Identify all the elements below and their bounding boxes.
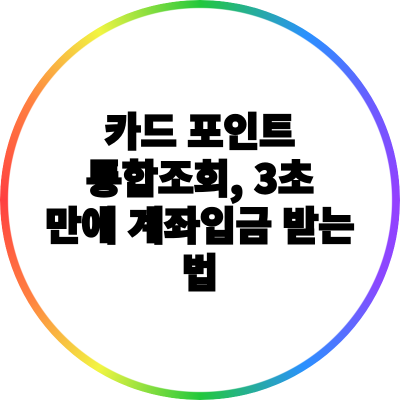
title: 만에 계좌입금 받는 — [46, 196, 354, 252]
title: 법 — [182, 243, 218, 299]
title — [46, 102, 354, 299]
title: 카드 포인트 — [105, 102, 295, 158]
title: 통합조회, 3초 — [86, 149, 314, 205]
